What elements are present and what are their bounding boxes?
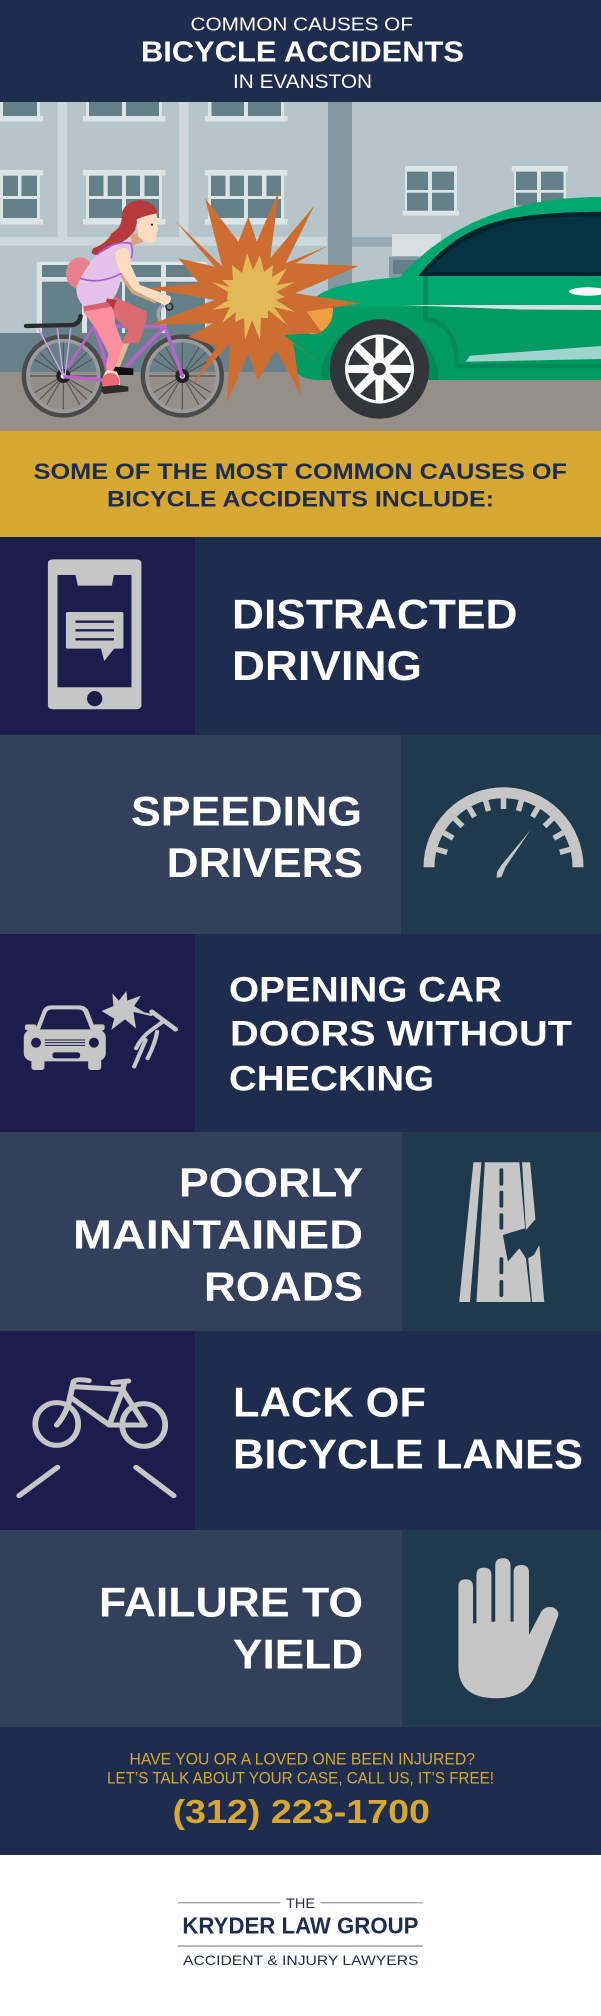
call to action panel xyxy=(0,1727,601,1855)
icon: raised hand xyxy=(458,1558,558,1698)
phone number: (312) 223-1700 xyxy=(172,1793,430,1830)
panel: distracted driving xyxy=(0,537,601,735)
panel: poorly maintained roads xyxy=(0,1132,601,1331)
label: distracted driving: DISTRACTED xyxy=(232,590,518,637)
label: poorly maintained roads: ROADS xyxy=(204,1264,363,1310)
explosion burst xyxy=(148,191,361,402)
label: lack of bicycle lanes: BICYCLE LANES xyxy=(233,1430,583,1477)
label: poorly maintained roads: POORLY xyxy=(179,1160,363,1206)
title line two: BICYCLE ACCIDENTS xyxy=(141,37,464,69)
headlight xyxy=(306,308,333,334)
woman rider xyxy=(66,200,171,394)
car xyxy=(284,197,601,419)
icon: phone with message xyxy=(48,559,141,709)
label: speeding drivers: DRIVERS xyxy=(167,839,363,886)
label: poorly maintained roads: MAINTAINED xyxy=(73,1211,363,1257)
gold banner xyxy=(0,431,601,537)
road xyxy=(0,372,601,431)
call to action text: LET’S TALK ABOUT YOUR CASE, CALL US, IT’S FREE! xyxy=(107,1769,494,1787)
title line three: IN EVANSTON xyxy=(233,72,372,93)
header panel xyxy=(0,0,601,102)
logo xyxy=(178,1895,423,1968)
car wheel xyxy=(330,319,429,419)
logo: tagline: ACCIDENT & INJURY LAWYERS xyxy=(183,1952,418,1968)
label: failure to yield: FAILURE TO xyxy=(99,1579,363,1626)
building background xyxy=(0,102,601,372)
label: failure to yield: YIELD xyxy=(233,1630,363,1677)
bicycle xyxy=(24,303,222,415)
label: speeding drivers: SPEEDING xyxy=(131,788,362,835)
panel: speeding drivers xyxy=(0,735,601,934)
panel: lack of bicycle lanes xyxy=(0,1331,601,1530)
icon: damaged road xyxy=(459,1162,544,1302)
panel: opening car doors xyxy=(0,934,601,1132)
label: opening car doors without checking: OPENING CAR xyxy=(229,971,502,1010)
icon: car door collision xyxy=(24,991,176,1070)
label: lack of bicycle lanes: LACK OF xyxy=(233,1379,426,1426)
panel: failure to yield xyxy=(0,1530,601,1727)
cyclist xyxy=(24,200,222,415)
banner text line one: SOME OF THE MOST COMMON CAUSES OF xyxy=(34,459,567,484)
illustration: cyclist hit by car xyxy=(0,102,601,431)
label: opening car doors without checking: CHECKING xyxy=(229,1060,434,1099)
icon: speedometer xyxy=(429,793,578,878)
logo: the: THE xyxy=(286,1895,315,1911)
banner text line two: BICYCLE ACCIDENTS INCLUDE: xyxy=(107,487,494,512)
call to action text: HAVE YOU OR A LOVED ONE BEEN INJURED? xyxy=(130,1751,475,1769)
logo: firm name: KRYDER LAW GROUP xyxy=(182,1912,418,1938)
icon: bicycle and lane lines xyxy=(19,1380,174,1496)
label: opening car doors without checking: DOORS WITHOUT xyxy=(230,1015,572,1054)
label: distracted driving: DRIVING xyxy=(232,642,422,689)
title line one: COMMON CAUSES OF xyxy=(190,14,413,35)
